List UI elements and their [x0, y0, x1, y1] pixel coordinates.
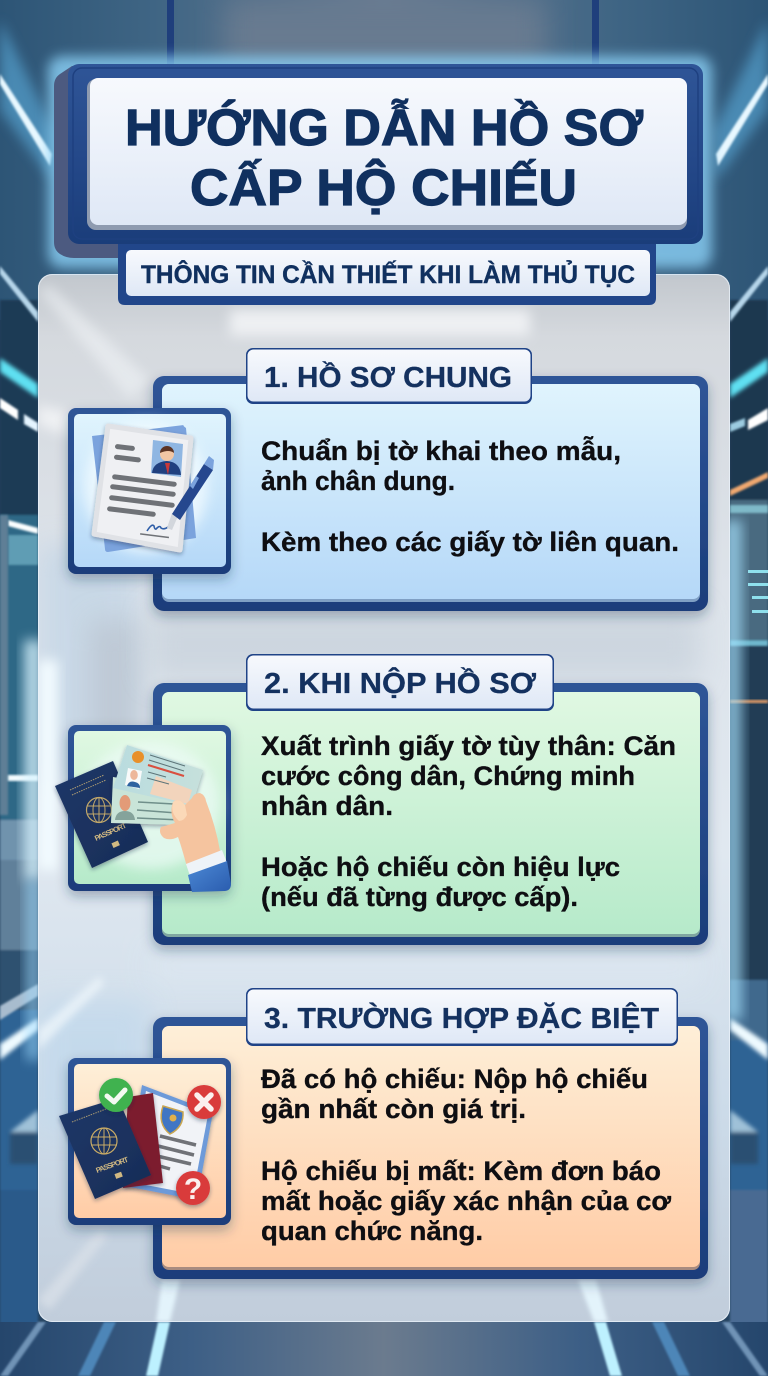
text block 3	[261, 1064, 672, 1246]
floor	[0, 1322, 768, 1376]
panel: card 2 khi nộp hồ sơ	[153, 654, 708, 945]
tab heading 1: 1. HỒ SƠ CHUNG	[264, 360, 512, 394]
ID cards	[111, 745, 203, 825]
tab heading 3: 3. TRƯỜNG HỢP ĐẶC BIỆT	[264, 1001, 659, 1035]
text block 2: cước công dân, Chứng minh	[261, 761, 635, 791]
hanger rods	[167, 0, 599, 66]
text block 1	[261, 435, 679, 557]
text block 3: mất hoặc giấy xác nhận của cơ	[261, 1186, 672, 1216]
text block 2: Xuất trình giấy tờ tùy thân: Căn	[261, 731, 676, 761]
text block 1: ảnh chân dung.	[261, 466, 455, 496]
tab heading 2: 2. KHI NỘP HỒ SƠ	[264, 666, 536, 700]
red passport	[123, 1093, 163, 1188]
panel: card 1 hồ sơ chung	[153, 348, 708, 611]
icon: red question badge	[176, 1171, 210, 1206]
text block 1: Kèm theo các giấy tờ liên quan.	[261, 527, 679, 557]
panel: card 3 trường hợp đặc biệt	[153, 988, 708, 1279]
passport: PASSPORT	[93, 821, 128, 843]
tab heading 3	[246, 988, 678, 1046]
icon: red question badge: ?	[184, 1173, 202, 1206]
icon: application form and pen	[68, 408, 231, 574]
ceiling: centre bay	[225, 0, 545, 70]
icon: red cross badge	[187, 1085, 221, 1119]
subtitle plate	[118, 244, 656, 305]
tab heading 1	[246, 348, 532, 404]
blue passport: PASSPORT	[95, 1155, 130, 1175]
title text: CẤP HỘ CHIẾU	[190, 158, 577, 216]
passport	[55, 761, 148, 868]
subtitle text: THÔNG TIN CẦN THIẾT KHI LÀM THỦ TỤC	[141, 259, 635, 289]
text block 2: nhân dân.	[261, 791, 393, 821]
icon: passports, report and status badges	[59, 1058, 231, 1225]
title text: HƯỚNG DẪN HỒ SƠ	[125, 98, 644, 156]
title plate	[48, 56, 712, 268]
text block 3: Hộ chiếu bị mất: Kèm đơn báo	[261, 1156, 661, 1186]
text block 2: Hoặc hộ chiếu còn hiệu lực	[261, 852, 620, 882]
report document	[125, 1085, 213, 1200]
text block 2: (nếu đã từng được cấp).	[261, 882, 578, 912]
hand	[160, 793, 220, 867]
text block 3: Đã có hộ chiếu: Nộp hộ chiếu	[261, 1064, 648, 1094]
text block 3: quan chức năng.	[261, 1216, 483, 1246]
tab heading 2	[246, 654, 554, 711]
icon: green check badge	[99, 1078, 133, 1112]
text block 3: gần nhất còn giá trị.	[261, 1094, 526, 1124]
icon: passport, ID cards and hand	[55, 725, 231, 892]
blue passport	[59, 1098, 151, 1199]
text block 2	[261, 731, 676, 912]
translucent main panel	[38, 274, 730, 1322]
walls	[0, 300, 768, 1325]
text block 1: Chuẩn bị tờ khai theo mẫu,	[261, 435, 621, 466]
title text	[125, 98, 644, 216]
